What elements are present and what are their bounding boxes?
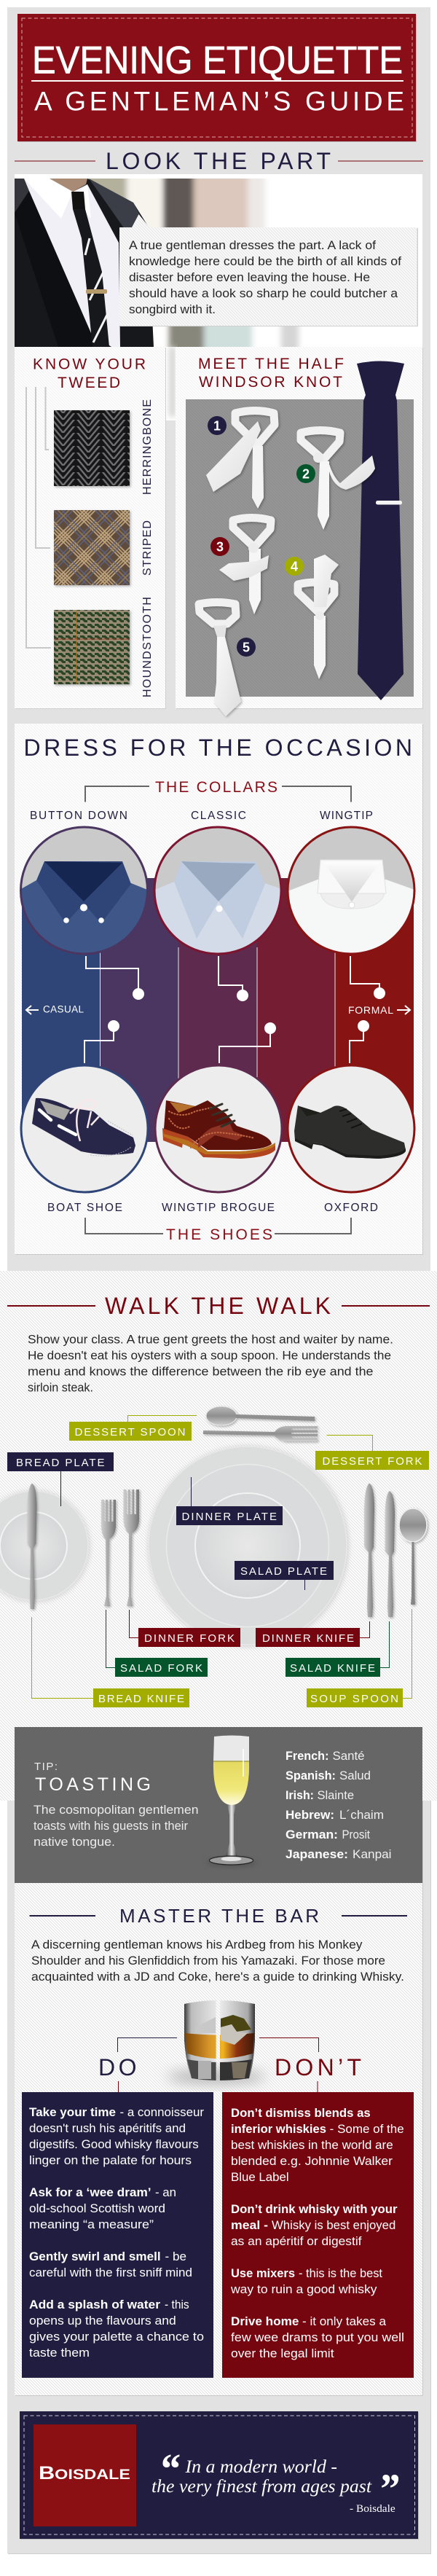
tree lines [26, 387, 51, 648]
text: master the bar intro: A discerning gentleman knows his Ardbeg from his Monkey [31, 1938, 363, 1951]
do panel: Ask for a ‘wee dram’ [29, 2186, 151, 2199]
callout: dress the part text: knowledge here could be the birth of all kinds of [129, 255, 401, 268]
step 3 tie [219, 517, 271, 614]
shoe: wingtip brogue [155, 1065, 282, 1192]
photo: man in suit [15, 179, 154, 347]
shoe: boat shoe [21, 1065, 148, 1192]
label: dessert spoon: DESSERT SPOON [74, 1426, 185, 1438]
toast list: Santé [332, 1750, 364, 1763]
quote [151, 2445, 399, 2515]
don't panel: Don’t dismiss blends as [231, 2107, 371, 2120]
label: dessert fork: DESSERT FORK [322, 1455, 422, 1468]
navy tie [357, 361, 404, 700]
don't panel: Whisky is best enjoyed [272, 2219, 395, 2232]
step badges: 5 [243, 640, 250, 654]
salad fork [101, 1500, 116, 1606]
dinner knife [364, 1484, 374, 1617]
scale label: formal: FORMAL [348, 1004, 393, 1016]
whisky glass [167, 2000, 266, 2083]
do panel: - this [165, 2298, 189, 2311]
don't panel [222, 2092, 414, 2378]
connectors: dots to shoes [84, 1020, 369, 1063]
toast list: Hebrew: [286, 1809, 334, 1822]
tip text: The cosmopolitan gentlemen [34, 1804, 198, 1817]
panel: toasting tip [15, 1727, 422, 1883]
step badges: 4 [291, 560, 298, 574]
heading: walk the walk: WALK THE WALK [105, 1293, 331, 1319]
text: master the bar intro [31, 1938, 404, 1984]
background: grey page panel, lower [7, 1801, 431, 2554]
shoe names [47, 1202, 378, 1214]
toast list: French: [286, 1750, 329, 1763]
label: dessert fork [315, 1451, 429, 1470]
shoe names: OXFORD [324, 1202, 378, 1214]
logo: boisdale [34, 2424, 136, 2526]
text: master the bar intro: Shoulder and his Glenfiddich from his Yamazaki. For those more [31, 1954, 385, 1968]
panel: look the part photo [15, 174, 422, 347]
label: dinner knife: DINNER KNIFE [262, 1632, 354, 1645]
text: walk the walk intro: menu and knows the difference between the rib eye and the [28, 1366, 373, 1379]
step badges: 1 [213, 418, 221, 433]
don't panel: Drive home [231, 2315, 299, 2328]
panel: master the bar background [15, 1801, 423, 2396]
shoe names: WINGTIP BROGUE [162, 1202, 275, 1214]
do panel: Take your time [29, 2106, 116, 2119]
text: walk the walk intro [28, 1334, 393, 1395]
background: hatched dining band [0, 1271, 437, 1801]
step 5 tie [199, 602, 241, 716]
don't panel: over the legal limit [231, 2347, 334, 2360]
step 2 tie [301, 430, 375, 530]
callout: dress the part text: disaster before even leaving the house. He [129, 271, 370, 284]
do panel: digestifs. Good whisky flavours [29, 2138, 199, 2151]
do panel: Add a splash of water [29, 2298, 161, 2311]
dinner plate [149, 1446, 348, 1646]
collar names: WINGTIP [320, 810, 373, 822]
quote: ” [378, 2465, 399, 2513]
do panel: meaning “a measure” [29, 2218, 154, 2231]
champagne glass [207, 1736, 256, 1867]
do panel: - be [165, 2250, 186, 2263]
step 4 tie [298, 555, 339, 679]
do panel: opens up the flavours and [29, 2314, 176, 2328]
don't label and bracket [259, 2037, 361, 2092]
salad knife [385, 1491, 395, 1617]
heading: know your tweed [33, 356, 146, 391]
background: grey page panel, upper [7, 7, 430, 1271]
step badges [208, 416, 315, 657]
tip text: native tongue. [34, 1836, 115, 1849]
panel: know your tweed [15, 347, 166, 709]
subtitle: A GENTLEMAN’S GUIDE [34, 86, 404, 117]
label: salad fork [115, 1658, 208, 1677]
step 1 tie [206, 411, 275, 509]
collar names: CLASSIC [191, 810, 246, 822]
place setting [0, 1406, 427, 1646]
step badges: 2 [302, 466, 310, 481]
callout: dress the part text [119, 214, 418, 326]
label: the shoes [85, 1218, 351, 1243]
label: salad plate: SALAD PLATE [240, 1565, 327, 1578]
don't panel: way to ruin a good whisky [230, 2283, 377, 2296]
don't label and bracket: DON’T [275, 2054, 361, 2080]
label: the collars [85, 779, 351, 802]
heading: master the bar: MASTER THE BAR [119, 1905, 319, 1927]
toast list [286, 1750, 392, 1861]
do panel: taste them [29, 2346, 90, 2360]
shoe names: BOAT SHOE [47, 1202, 122, 1214]
label: salad plate [235, 1561, 334, 1580]
panel: dress for the occasion [15, 724, 423, 1255]
swatch: herringbone [54, 410, 130, 486]
label: the shoes: THE SHOES [166, 1226, 272, 1243]
toast list: Irish: [286, 1789, 314, 1802]
label: dinner fork [138, 1628, 240, 1647]
text: walk the walk intro: Show your class. A true gent greets the host and waiter by name. [28, 1334, 393, 1347]
swatch: houndstooth [54, 610, 130, 684]
collar names: BUTTON DOWN [30, 810, 127, 822]
label: houndstooth: HOUNDSTOOTH [141, 597, 154, 697]
dessert spoon [206, 1406, 315, 1425]
do panel [22, 2092, 213, 2378]
tip text: toasts with his guests in their [34, 1820, 189, 1833]
do column [22, 2037, 213, 2378]
heading: know your tweed: KNOW YOUR [33, 356, 146, 373]
do panel: - a connoisseur [119, 2106, 205, 2119]
do panel: old-school Scottish word [29, 2202, 165, 2215]
label: striped: STRIPED [141, 520, 154, 576]
do panel: linger on the palate for hours [29, 2154, 192, 2167]
collar: wingtip [284, 827, 417, 962]
label: salad knife [286, 1658, 380, 1677]
do panel: Gently swirl and smell [29, 2250, 161, 2263]
don't panel: - this is the best [299, 2267, 382, 2280]
label: bread plate: BREAD PLATE [16, 1457, 105, 1469]
don't panel: Blue Label [231, 2171, 289, 2184]
logo: boisdale: BOISDALE [39, 2463, 130, 2483]
heading: half windsor [198, 356, 344, 391]
footer banner [20, 2411, 419, 2540]
label: salad knife: SALAD KNIFE [290, 1662, 375, 1675]
label: dinner knife [256, 1628, 360, 1647]
panel: meet the half windsor knot [176, 347, 423, 716]
quote: “ [159, 2445, 180, 2492]
don't panel: - it only takes a [302, 2315, 387, 2328]
don't panel: Use mixers [231, 2267, 295, 2280]
label: soup spoon: SOUP SPOON [310, 1693, 398, 1705]
don't panel: inferior whiskies [231, 2123, 326, 2136]
heading: look the part: LOOK THE PART [106, 148, 331, 174]
toast list: Spanish: [286, 1769, 336, 1782]
collar: button down [20, 826, 147, 955]
photo strip between panels [165, 347, 176, 420]
grey tie steps panel [186, 399, 414, 697]
quote: the very finest from ages past [151, 2477, 372, 2497]
label: herringbone: HERRINGBONE [141, 399, 154, 495]
don't panel: best whiskies in the world are [231, 2139, 393, 2152]
callout: dress the part text: songbird with it. [129, 303, 216, 316]
don't panel: Don’t drink whisky with your [231, 2203, 398, 2216]
do label and bracket: DO [98, 2054, 137, 2080]
do label and bracket [98, 2037, 177, 2094]
text: walk the walk intro: He doesn't eat his oysters with a soup spoon. He understands the [28, 1350, 391, 1363]
label: salad fork: SALAD FORK [120, 1662, 202, 1675]
toast list: Prosit [342, 1828, 370, 1841]
label: bread plate [7, 1452, 114, 1471]
scale label: casual: CASUAL [43, 1004, 84, 1014]
toast list: Kanpai [353, 1848, 392, 1861]
tip heading: TOASTING [35, 1774, 151, 1795]
heading: know your tweed: TWEED [58, 375, 120, 391]
do panel: gives your palette a chance to [29, 2330, 204, 2344]
text: walk the walk intro: sirloin steak. [28, 1382, 93, 1395]
dessert fork [203, 1426, 318, 1441]
tip text [34, 1804, 198, 1849]
connectors: collars to dots [86, 956, 385, 1001]
callout: dress the part text: should have a look so sharp he could butcher a [129, 287, 398, 300]
collar: classic [149, 827, 286, 962]
title text: EVENING ETIQUETTE [32, 39, 403, 82]
toast list: Salud [339, 1769, 371, 1782]
don't panel: blended e.g. Johnnie Walker [231, 2155, 393, 2168]
do panel: - an [155, 2186, 176, 2199]
toast list: Japanese: [286, 1848, 348, 1861]
casual to formal colour band [22, 878, 414, 1142]
don't panel: few wee drams to put you well [231, 2331, 404, 2344]
label: bread knife [93, 1688, 189, 1707]
blurred street background [87, 179, 301, 347]
toast list: L´chaim [339, 1809, 384, 1822]
shoe: oxford [288, 1065, 414, 1192]
label: the collars: THE COLLARS [155, 779, 277, 796]
dinner fork [124, 1489, 139, 1606]
don't column [222, 2037, 414, 2378]
label: soup spoon [307, 1688, 403, 1707]
title banner [17, 14, 417, 142]
don't panel: as an apéritif or digestif [231, 2235, 362, 2248]
quote: In a modern world - [184, 2457, 337, 2477]
leader lines: cutlery labels [32, 1415, 412, 1698]
do panel: careful with the first sniff mind [29, 2266, 192, 2279]
soup spoon [399, 1508, 427, 1605]
bread knife [28, 1484, 36, 1609]
label: dinner plate [176, 1506, 283, 1525]
quote: - Boisdale [350, 2503, 395, 2515]
collar names [30, 810, 373, 822]
swatch: striped [54, 510, 130, 585]
label: bread knife: BREAD KNIFE [98, 1693, 184, 1705]
text: master the bar intro: acquainted with a JD and Coke, here's a guide to drinking Whisky. [31, 1970, 404, 1984]
heading: dress for the occasion: DRESS FOR THE OCCASION [23, 735, 412, 761]
don't panel: meal - [231, 2219, 268, 2232]
heading: half windsor: MEET THE HALF [198, 356, 344, 372]
bread plate [0, 1491, 90, 1602]
label: dinner fork: DINNER FORK [144, 1632, 235, 1645]
callout: dress the part text: A true gentleman dresses the part. A lack of [129, 239, 376, 252]
tip kicker: TIP: [34, 1761, 58, 1773]
label: dinner plate: DINNER PLATE [182, 1511, 277, 1523]
step badges: 3 [216, 539, 224, 554]
label: dessert spoon [69, 1422, 192, 1441]
heading: half windsor: WINDSOR KNOT [199, 374, 342, 391]
do panel: doesn't rush his apéritifs and [29, 2122, 186, 2135]
don't panel: - Some of the [330, 2123, 404, 2136]
toast list: German: [286, 1828, 338, 1841]
toast list: Slainte [318, 1789, 354, 1802]
